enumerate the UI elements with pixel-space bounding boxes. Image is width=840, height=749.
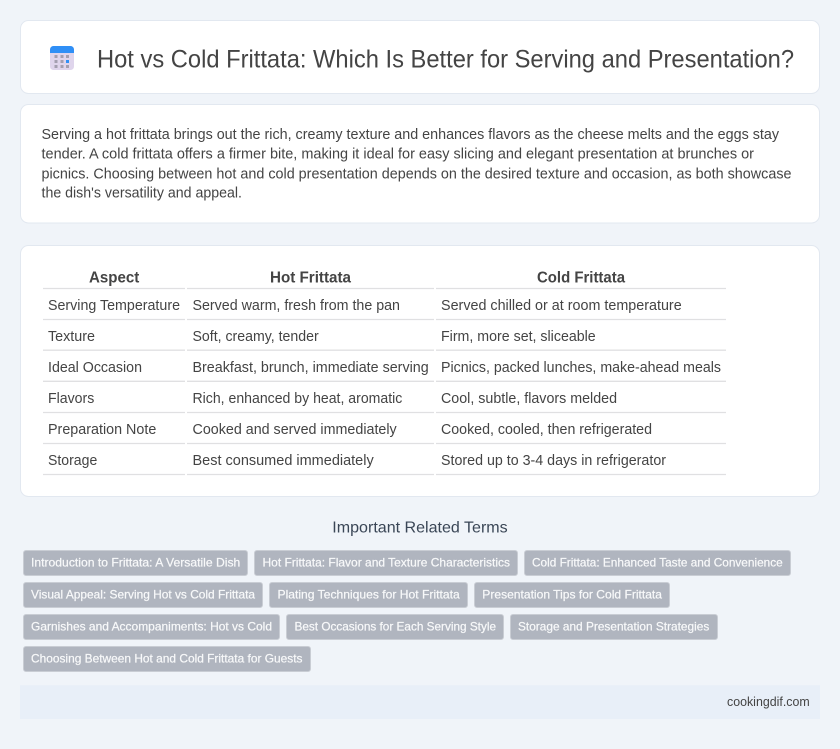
table row: preparation note: Cooked and served immediately: [192, 422, 397, 438]
chip: best occasions: [286, 614, 504, 640]
chip: best occasions: Best Occasions for Each Serving Style: [294, 620, 496, 634]
table row: storage: [43, 453, 726, 474]
chip: introduction to frittata: [24, 550, 248, 576]
chip: storage strategies: Storage and Presentation Strategies: [518, 620, 709, 634]
table row: serving temperature: Served chilled or at room temperature: [441, 298, 682, 314]
table row: texture: Texture: [48, 329, 95, 345]
title: Hot vs Cold Frittata: Which Is Better for Serving and Presentation?: [97, 45, 794, 73]
panel: introduction: [20, 104, 820, 223]
table header: [43, 270, 726, 288]
panel: comparison table: [20, 246, 820, 496]
chip: presentation tips: [474, 582, 670, 608]
table row: preparation note: Cooked, cooled, then refrigerated: [441, 422, 652, 438]
related term chips: [24, 550, 790, 672]
chip: visual appeal: Visual Appeal: Serving Hot vs Cold Frittata: [31, 588, 255, 602]
chip: garnishes: [24, 614, 280, 640]
text block: introduction paragraph: tender. A cold frittata offers a firmer bite, making it ideal for easy slicing and elegant presentation at brunches or: [42, 147, 754, 163]
chip: choosing for guests: [24, 646, 310, 672]
table row: preparation note: [43, 422, 726, 444]
table row: serving temperature: Serving Temperature: [48, 298, 180, 314]
chip: storage strategies: [510, 614, 718, 640]
chip: hot frittata characteristics: [254, 550, 518, 576]
footer source: cookingdif.com: [727, 694, 810, 709]
table row: texture: [43, 329, 726, 350]
chip: introduction to frittata: Introduction to Frittata: A Versatile Dish: [31, 556, 240, 570]
table header: Aspect: [89, 270, 140, 287]
heading: important related terms: Important Related Terms: [332, 520, 508, 537]
table row: storage: Stored up to 3-4 days in refrigerator: [441, 453, 666, 469]
table row: serving temperature: [43, 298, 726, 320]
chip: visual appeal: [24, 582, 262, 608]
icon: calendar: [50, 46, 74, 70]
table row: ideal occasion: [43, 360, 726, 381]
table row: storage: Storage: [48, 453, 97, 469]
chip: hot frittata characteristics: Hot Frittata: Flavor and Texture Characteristics: [262, 556, 510, 570]
panel: title card: [20, 20, 820, 94]
table row: ideal occasion: Ideal Occasion: [48, 360, 142, 376]
table row: flavors: Rich, enhanced by heat, aromatic: [192, 391, 402, 407]
table row: texture: Soft, creamy, tender: [192, 329, 319, 345]
chip: presentation tips: Presentation Tips for Cold Frittata: [482, 588, 662, 602]
table row: preparation note: Preparation Note: [48, 422, 156, 438]
table header: Hot Frittata: [270, 270, 351, 287]
table row: flavors: Cool, subtle, flavors melded: [441, 391, 617, 407]
table header: Cold Frittata: [537, 270, 625, 287]
table row: flavors: Flavors: [48, 391, 94, 407]
table row: flavors: [43, 391, 726, 412]
chip: plating techniques: Plating Techniques for Hot Frittata: [278, 588, 460, 602]
table row: ideal occasion: Breakfast, brunch, immediate serving: [192, 360, 429, 376]
chip: choosing for guests: Choosing Between Hot and Cold Frittata for Guests: [31, 652, 302, 666]
text block: introduction paragraph: the dish's versatility and appeal.: [42, 186, 242, 202]
footer bar: [20, 685, 820, 719]
chip: cold frittata taste: [524, 550, 790, 576]
table row: storage: Best consumed immediately: [192, 453, 374, 469]
text block: introduction paragraph: [42, 127, 792, 202]
table row: texture: Firm, more set, sliceable: [441, 329, 596, 345]
chip: garnishes: Garnishes and Accompaniments: Hot vs Cold: [31, 620, 272, 634]
text block: introduction paragraph: picnics. Choosing between hot and cold presentation depends on the desired texture and occasion, as both showcase: [42, 166, 792, 182]
table row: ideal occasion: Picnics, packed lunches, make-ahead meals: [441, 360, 721, 376]
chip: plating techniques: [270, 582, 468, 608]
chip: cold frittata taste: Cold Frittata: Enhanced Taste and Convenience: [532, 556, 783, 570]
table row: serving temperature: Served warm, fresh from the pan: [192, 298, 400, 314]
text block: introduction paragraph: Serving a hot frittata brings out the rich, creamy texture and enhances flavors as the cheese melts and the eggs stay: [42, 127, 780, 143]
